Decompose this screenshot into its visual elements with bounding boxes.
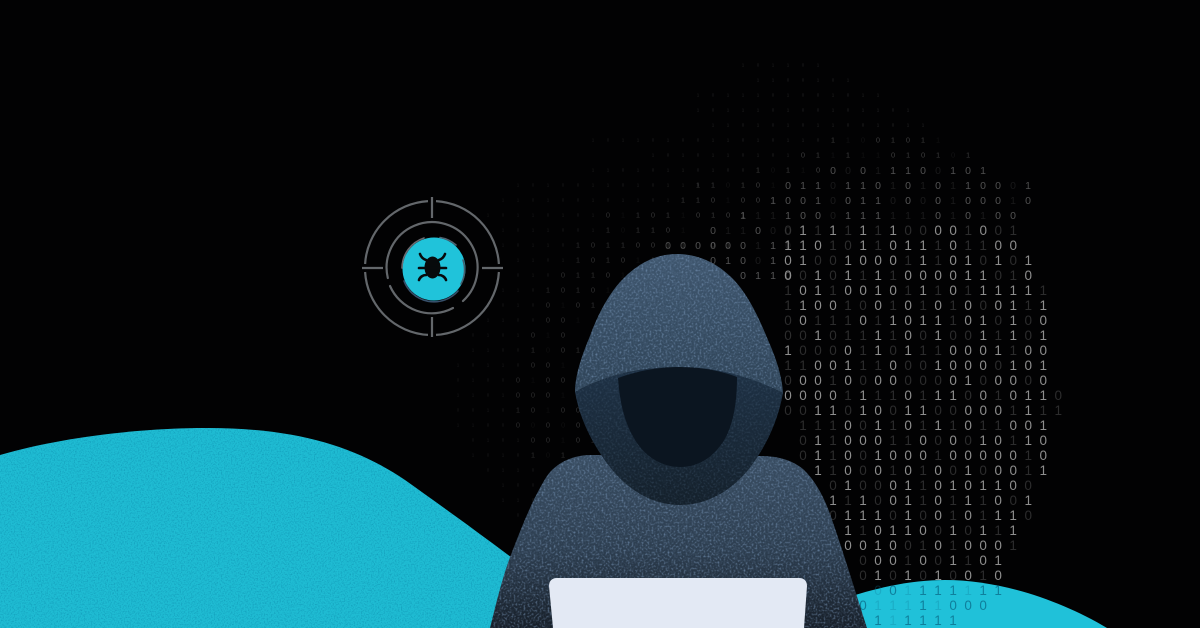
hood [575,254,783,393]
teal wave: right [840,580,1107,628]
binary digit field: 1011010011010110 [592,138,832,143]
binary digit field: 000100000000100000 [784,373,1055,388]
binary digit field: 101011 [576,256,666,265]
binary digit field: 0100 [457,378,517,383]
binary digit field: 00101 [531,436,606,445]
binary digit field: 1010 [472,453,532,458]
inner ring [387,222,478,313]
binary digit field: 001001010001 [844,538,1024,553]
binary digit field: 110101011001011 [712,123,937,128]
binary digit field: 110010010101000111 [784,298,1055,313]
binary digit field: 01000110101100 [829,478,1039,493]
binary digit field: 110110010111 [844,523,1024,538]
binary digit field: 11100110111001 [829,493,1039,508]
binary digit field: 001 [546,316,591,325]
binary digit field: 0101 [472,333,532,338]
binary digit field: 10100 [516,406,591,415]
binary digit field: 000000110 [665,240,800,252]
binary digit field: 0110 [740,270,800,282]
binary digit field: 1010 [487,303,547,308]
binary digits on teal wave [859,583,1009,628]
hacker figure [490,254,867,628]
binary digit field: 1100101 [757,78,862,83]
body [490,455,867,628]
binary digit field: 1001 [531,346,591,355]
binary digit field: 1101 [457,393,517,398]
binary digit field: 1100 [457,423,517,428]
binary digit field: 01101 [561,271,636,280]
binary digit field: 1010011010110 [517,183,712,188]
binary digit field: 110101 [696,181,786,190]
binary digit field: 101101 [742,63,832,68]
teal disc [402,238,466,300]
binary digit field: 1001 [502,483,562,488]
binary digit field: 0001 [516,391,576,400]
binary digits on teal wave: 001111111 [874,583,1009,598]
binary digit field: 0101 [546,301,606,310]
binary digit field: 01 [517,513,547,518]
target icon with bug [362,197,503,337]
binary digit field: 101101 [606,226,696,235]
binary digit field: 11100110111011001 [799,418,1054,433]
binary digit field: 010 [517,273,562,278]
binary digit field: 1101011011101100 [784,238,1024,253]
binary digit field: 0100 [516,376,576,385]
binary digit field: 1100 [487,318,547,323]
binary digits on teal wave: 011111000 [859,598,994,613]
binary digit field: 0110110101 [606,211,756,220]
binary digit field: 1011001 [502,228,607,233]
binary digit field: 101110100101101 [697,108,922,113]
binary digit field: 1101001 [681,196,786,205]
laptop [549,578,807,628]
binary digit field: 0001001101 [859,553,1009,568]
hood inner shadow [575,367,783,505]
binary digit field: 110100101101 [502,198,682,203]
binary digit field: 011111010101 [801,151,981,160]
binary digit field: 101100101110111111 [784,283,1054,298]
binary digit field: 01101101010110001 [785,180,1040,192]
binary digit field: 001011110010011101 [784,328,1055,343]
binary digit field: 00011100101 [830,165,995,177]
binary digit field: 0101 [472,438,532,443]
binary digit field: 000001 [516,421,606,430]
disc rim accents [402,238,465,302]
binary digit field: 1101 [517,258,577,263]
binary digit field: 1011101001011 [697,93,892,98]
binary digit field: 0010 [457,408,517,413]
binary digit field: 10101 [546,286,621,295]
binary digit field: 011000 [710,225,800,237]
binary digit field: 00101111000011010 [784,268,1039,283]
binary digit field: 100100110000100010 [770,195,1040,207]
binary digit field: 0110 [487,468,547,473]
binary digit field: 10110011001 [576,241,741,250]
binary digit field: 0101010010 [859,568,1009,583]
binary digit field: 01100011000010110 [799,433,1054,448]
binary digit field: 11010110100 [592,168,757,173]
binary digit field: 10110 [457,363,532,368]
binary digit field: 0011010011000001111 [784,403,1070,418]
binary digit field: 101 [531,451,576,460]
binary digits on teal wave: 111111 [874,613,964,628]
binary digit field: 11001011 [831,136,951,145]
binary digit field: 01001000111010101 [784,253,1040,268]
outer crosshair ring [362,197,503,337]
binary digit field: 1010110101 [652,153,802,158]
binary digit field: 100001101110001100 [784,343,1054,358]
binary digit field: 10110 [756,166,831,175]
binary digit field: 01001 [710,255,785,267]
binary digit field: 10110 [502,243,577,248]
teal wave: left [0,428,520,628]
binary digit field: 1111000111111010100 [740,210,1025,222]
binary digit field: 0000111101110010110 [784,388,1070,403]
bug [419,254,446,280]
binary digit field: 001 [531,361,576,370]
binary digit field: 01100100010000010 [799,448,1054,463]
binary digit field: 01110100101110 [829,508,1039,523]
binary digit field: 1100010100100011 [814,463,1054,478]
binary digit field: 010 [531,331,576,340]
binary digit field [457,63,1070,583]
binary digit field: 110011100010000101 [784,358,1054,373]
binary digit field: 110 [502,498,547,503]
binary digit field: 0111111100001001 [784,223,1024,238]
binary digit field: 10110101 [487,213,607,218]
binary digit field: 1100 [472,348,532,353]
binary digit field: 110 [502,288,547,293]
binary digit field: 001110110111010100 [784,313,1054,328]
face void [618,367,737,467]
